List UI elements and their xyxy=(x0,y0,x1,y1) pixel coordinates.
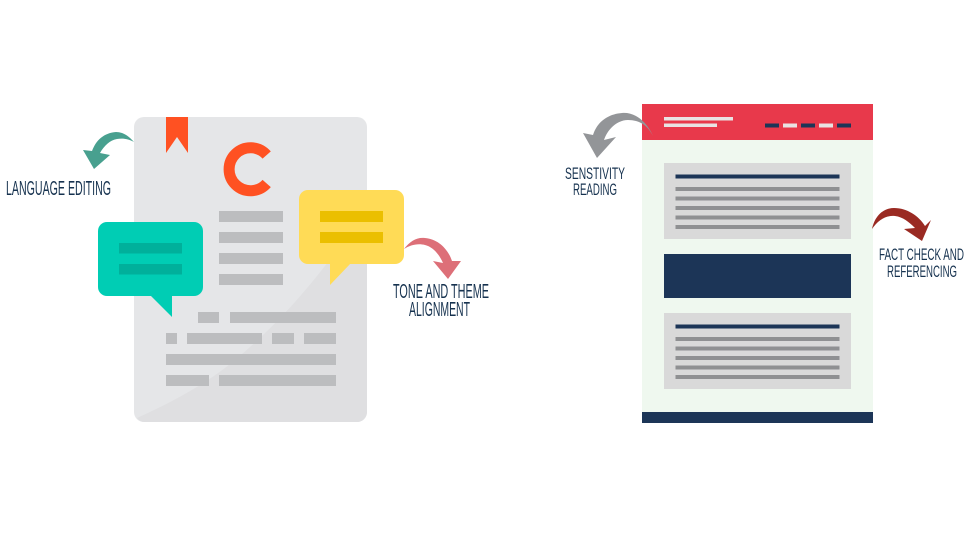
arrow: tone and theme xyxy=(404,238,461,279)
arrow: fact check xyxy=(872,208,931,241)
label: sensitivity reading: READING xyxy=(573,180,617,199)
navy banner xyxy=(664,254,851,298)
header title lines xyxy=(664,117,733,127)
bottom article block xyxy=(664,313,851,389)
navy footer xyxy=(642,412,873,423)
header menu xyxy=(765,124,851,128)
document page xyxy=(134,117,367,422)
red header xyxy=(642,104,873,140)
label: fact check and referencing xyxy=(879,245,964,281)
label: sensitivity reading xyxy=(565,164,625,199)
green speech bubble xyxy=(98,222,203,317)
bookmark xyxy=(166,117,188,153)
yellow speech bubble xyxy=(299,190,404,285)
document illustration xyxy=(98,117,404,422)
label: tone and theme alignment xyxy=(393,281,489,321)
label: tone and theme alignment: TONE AND THEME xyxy=(393,281,489,303)
arrow: sensitivity reading xyxy=(583,113,653,158)
label: language editing: LANGUAGE EDITING xyxy=(6,178,111,200)
arrow: language editing xyxy=(83,132,134,169)
label: tone and theme alignment: ALIGNMENT xyxy=(409,299,470,321)
webpage illustration xyxy=(642,104,873,423)
page shading xyxy=(137,240,367,422)
label: sensitivity reading: SENSTIVITY xyxy=(565,164,625,183)
top article block xyxy=(664,163,851,239)
page background xyxy=(642,140,873,412)
letter C xyxy=(229,148,267,191)
text lines xyxy=(166,211,336,386)
